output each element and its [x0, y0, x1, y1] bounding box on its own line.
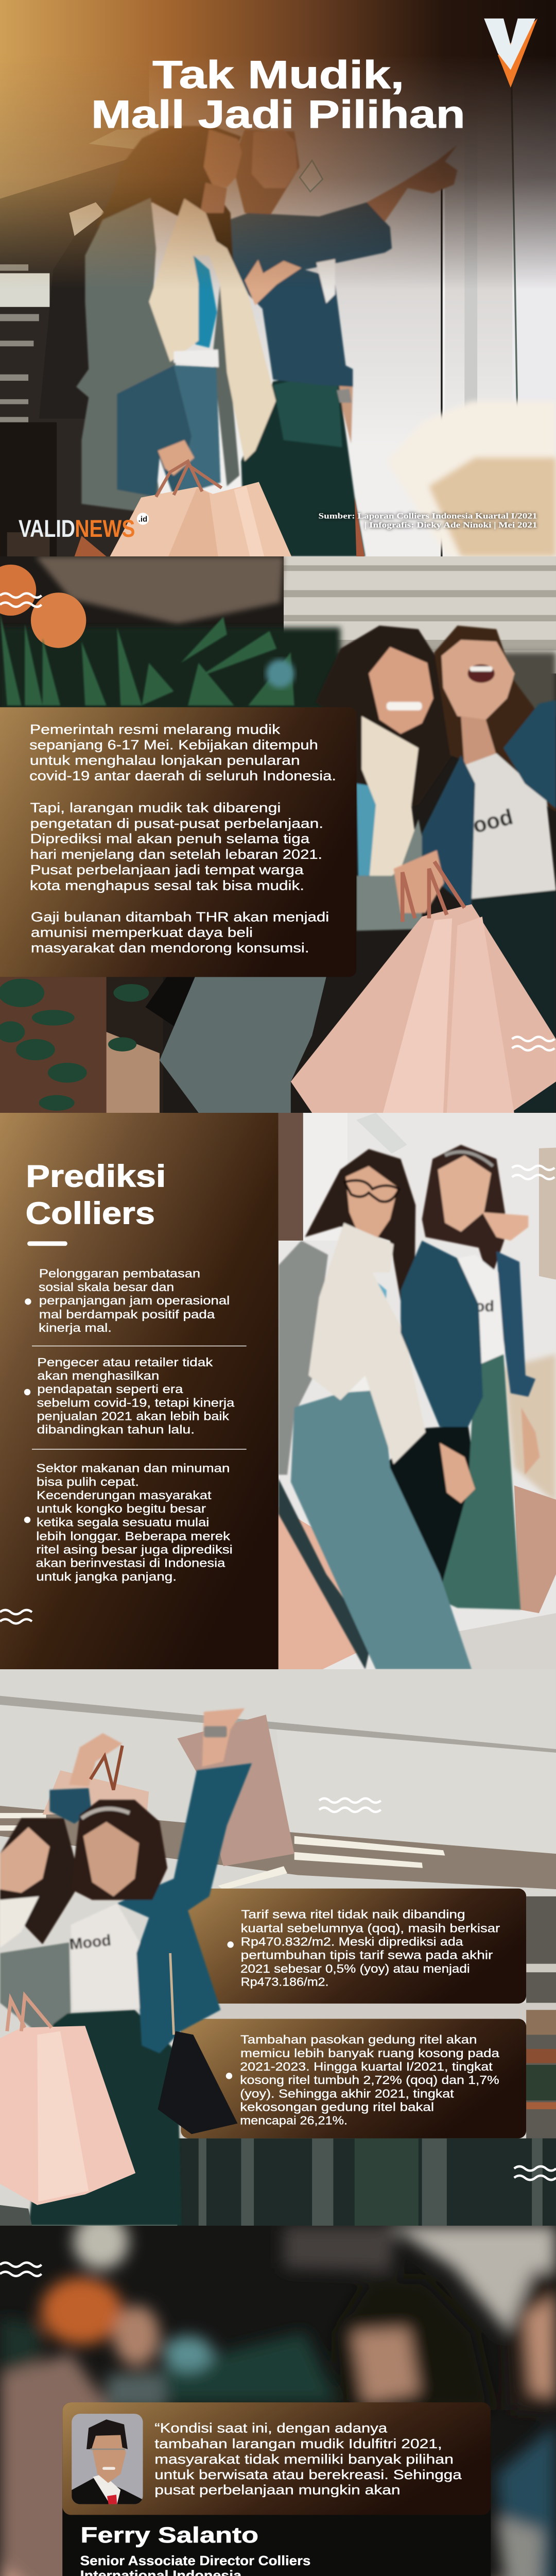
text block: masyarakat dan mendorong konsumsi. [31, 941, 309, 956]
photo: two women walking [279, 1113, 556, 1669]
text: rent: Rp473.186/m2. [241, 1975, 328, 1988]
panel: vacancy [181, 2019, 526, 2139]
text: vacancy: mencapai 26,21%. [240, 2114, 348, 2127]
bullet 1: perpanjangan jam operasional [39, 1294, 230, 1307]
text block: pengetatan di pusat-pusat perbelanjaan. [30, 817, 323, 831]
text: vacancy: 2021-2023. Hingga kuartal I/2021, tingkat [240, 2060, 493, 2073]
text block: amunisi memperkuat daya beli [31, 925, 253, 940]
text block: covid-19 antar daerah di seluruh Indonesia. [29, 769, 336, 784]
bullet 3: ritel asing besar juga diprediksi [36, 1543, 233, 1556]
heading: Prediksi [26, 1158, 166, 1193]
quote text: untuk berwisata atau berekreasi. Sehingga [154, 2468, 462, 2482]
title: Tak Mudik, [152, 53, 404, 97]
speaker title [80, 2554, 310, 2576]
text block: Tapi, larangan mudik tak dibarengi [30, 801, 281, 816]
text: vacancy: kosong ritel tumbuh 2,72% (qoq) dan 1,7% [240, 2073, 499, 2087]
source credit: Sumber: Laporan Colliers Indonesia Kuartal I/2021 [319, 512, 537, 520]
section 2: intro [0, 556, 556, 1113]
logo: VALIDNEWS.id [19, 513, 149, 537]
card: quote [62, 2402, 491, 2576]
bullet 1: sosial skala besar dan [39, 1280, 174, 1294]
quote text: masyarakat tidak memiliki banyak pilihan [154, 2452, 454, 2467]
bullet 3: akan berinvestasi di Indonesia [36, 1556, 226, 1570]
text block: hari menjelang dan setelah lebaran 2021. [30, 848, 322, 862]
text: rent: kuartal sebelumnya (qoq), masih berkisar [241, 1921, 500, 1935]
quote text: pusat perbelanjaan mungkin akan [154, 2483, 401, 2497]
title [94, 60, 463, 129]
bullet 2: akan menghasilkan [37, 1369, 159, 1382]
bullet 1: Pelonggaran pembatasan [39, 1267, 200, 1280]
bullet 3 [24, 1462, 233, 1583]
bullet 2: Pengecer atau retailer tidak [37, 1355, 213, 1369]
text: vacancy: memicu lebih banyak ruang kosong pada [240, 2046, 500, 2060]
text: vacancy [226, 2033, 500, 2127]
photo: women holding bags up [0, 1708, 294, 2226]
panel: rent [184, 1889, 526, 2004]
bullet 2: pendapatan seperti era [37, 1382, 184, 1396]
text block: kota menghapus sesal tak bisa mudik. [30, 878, 304, 893]
text: rent: pertumbuhan tipis tarif sewa pada akhir [241, 1948, 493, 1962]
text block: untuk menghalau lonjakan penularan [30, 753, 300, 768]
photo: two women at shop window [0, 0, 556, 556]
photo: two laughing women: ood [471, 804, 515, 838]
bullet 2 [24, 1355, 235, 1436]
text: rent: Rp470.832/m2. Meski diprediksi ada [241, 1935, 464, 1948]
speaker title: Senior Associate Director Colliers [80, 2554, 310, 2568]
bullet 3: bisa pulih cepat. [37, 1475, 139, 1488]
bullet 3: untuk jangka panjang. [36, 1570, 177, 1583]
text block [29, 722, 336, 956]
bullet 3: ketika segala sesuatu mulai [37, 1515, 209, 1529]
logo: VALIDNEWS.id: VALID [19, 515, 75, 542]
section 1: hero [0, 0, 556, 556]
source credit [319, 512, 537, 530]
text: rent: Tarif sewa ritel tidak naik dibanding [241, 1908, 465, 1921]
photo: women holding bags up: Mood [69, 1932, 112, 1953]
bullet 3: Sektor makanan dan minuman [36, 1462, 230, 1475]
photo background: blurred women [0, 2214, 556, 2576]
panel: intro text [0, 707, 356, 977]
text: rent [228, 1908, 500, 1988]
logo: V mark [484, 19, 537, 88]
text block: Gaji bulanan ditambah THR akan menjadi [31, 910, 329, 925]
bullet 1: kinerja mal. [39, 1321, 112, 1334]
bullet 3: Kecenderungan masyarakat [37, 1488, 212, 1502]
photo: two women walking: od [475, 1298, 494, 1315]
heading [27, 1164, 164, 1224]
photo: two laughing women [0, 556, 556, 1113]
text: vacancy: Tambahan pasokan gedung ritel akan [240, 2033, 477, 2046]
portrait: Ferry Salanto [72, 2414, 143, 2504]
section 5: quote [0, 2214, 556, 2576]
text block: sepanjang 6-17 Mei. Kebijakan ditempuh [29, 738, 318, 753]
section 3: Prediksi Colliers [0, 1113, 556, 1669]
heading: Colliers [26, 1196, 155, 1231]
bullet 2: dibandingkan tahun lalu. [37, 1423, 195, 1436]
speaker name: Ferry Salanto [80, 2523, 258, 2548]
bullet 1 [25, 1267, 230, 1334]
quote text: tambahan larangan mudik Idulfitri 2021, [154, 2437, 442, 2451]
title: Mall Jadi Pilihan [91, 93, 465, 137]
quote text [154, 2421, 462, 2497]
text block: Pemerintah resmi melarang mudik [30, 722, 280, 737]
source credit: | Infografis: Dieky Ade Ninoki | Mei 2021 [364, 521, 537, 530]
bullet 3: lebih longgar. Beberapa merek [36, 1529, 230, 1543]
bullet 1: mal berdampak positif pada [39, 1308, 216, 1321]
text: rent: 2021 sebesar 0,5% (yoy) atau menjadi [240, 1962, 470, 1975]
bullet 2: penjualan 2021 akan lebih baik [37, 1409, 229, 1422]
quote text: “Kondisi saat ini, dengan adanya [154, 2421, 388, 2436]
logo: VALIDNEWS.id: .id [138, 515, 147, 523]
section 4: rent and vacancy [0, 1669, 556, 2226]
panel: predictions [0, 1113, 279, 1669]
text: vacancy: (yoy). Sehingga akhir 2021, tingkat [240, 2087, 454, 2100]
text block: Diprediksi mal akan penuh selama tiga [30, 832, 310, 846]
bullet 3: untuk kongko begitu besar [37, 1502, 206, 1515]
logo: VALIDNEWS.id: NEWS [75, 515, 135, 542]
text block: Pusat perbelanjaan jadi tempat warga [30, 863, 304, 877]
bullet 2: sebelum covid-19, tetapi kinerja [37, 1396, 235, 1409]
text: vacancy: kekosongan gedung ritel bakal [240, 2100, 434, 2114]
photo background: mall ceiling [0, 1669, 556, 2226]
